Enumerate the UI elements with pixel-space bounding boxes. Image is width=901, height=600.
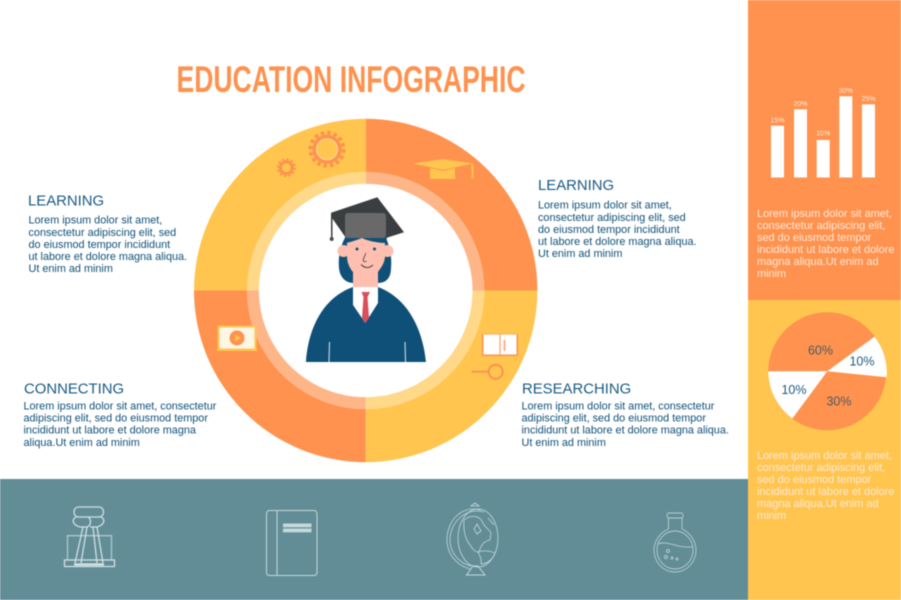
text block: orange panel: minim bbox=[757, 268, 786, 280]
text block: learning right bbox=[538, 178, 697, 260]
text block: connecting: aliqua.Ut enim ad minim bbox=[24, 437, 140, 449]
donut ring bbox=[194, 119, 537, 462]
title: EDUCATION INFOGRAPHIC bbox=[176, 59, 526, 100]
text block: yellow panel bbox=[757, 450, 894, 522]
text block: connecting: incididunt ut labore et dolore magna bbox=[24, 425, 197, 437]
panel: yellow pie chart side panel bbox=[748, 300, 901, 600]
bar chart bbox=[770, 88, 876, 178]
text block: learning left: do eiusmod tempor incididunt bbox=[28, 239, 170, 251]
text block: learning right: Ut enim ad minim bbox=[538, 248, 622, 260]
text block: researching bbox=[522, 382, 729, 449]
icon: graduation cap bbox=[413, 159, 473, 179]
text block: researching: incididunt ut labore et dolore magna aliqua. bbox=[522, 425, 729, 437]
text block: learning left: ut labore et dolore magna aliqua. bbox=[28, 251, 187, 263]
facial features bbox=[356, 248, 376, 268]
shirt and tie bbox=[353, 287, 378, 323]
icon: flask bbox=[654, 513, 696, 572]
bar chart: 10% bbox=[816, 130, 830, 138]
icon: magnifier bbox=[472, 365, 503, 379]
fringe bbox=[345, 237, 387, 243]
pie chart bbox=[768, 312, 887, 430]
panel: orange bar chart side panel bbox=[748, 0, 901, 300]
illustration: graduate bbox=[306, 197, 426, 362]
icon: globe bbox=[447, 503, 498, 575]
text block: learning left: Lorem ipsum dolor sit amet, bbox=[28, 215, 162, 227]
text block: learning right: LEARNING bbox=[538, 178, 614, 194]
text block: connecting: Lorem ipsum dolor sit amet, consectetur bbox=[24, 400, 217, 412]
text block: orange panel: incididunt ut labore et dolore bbox=[757, 244, 894, 256]
bar chart: 15% bbox=[770, 118, 785, 124]
text block: learning right: consectetur adipiscing elit, sed bbox=[538, 212, 686, 224]
text block: learning left: consectetur adipiscing elit, sed bbox=[28, 227, 176, 239]
text block: orange panel: consectetur adipiscing elit, bbox=[757, 220, 885, 232]
bar chart: 20% bbox=[793, 101, 808, 108]
text block: learning right: ut labore et dolore magna aliqua. bbox=[538, 236, 697, 248]
text block: learning left: LEARNING bbox=[28, 194, 104, 210]
text block: learning right: do eiusmod tempor incididunt bbox=[538, 224, 680, 236]
text block: researching: RESEARCHING bbox=[522, 382, 631, 398]
icon: video screen bbox=[217, 326, 257, 351]
text block: yellow panel: incididunt ut labore et dolore bbox=[757, 486, 894, 498]
text block: learning right: Lorem ipsum dolor sit amet, bbox=[538, 200, 672, 212]
text block: orange panel bbox=[757, 208, 894, 280]
pie chart: 10% bbox=[849, 354, 875, 368]
pie chart: 60% bbox=[808, 344, 833, 358]
text block: orange panel: sed do eiusmod tempor bbox=[757, 232, 872, 244]
text block: yellow panel: magna aliqua.Ut enim ad bbox=[757, 498, 879, 510]
mortarboard bbox=[330, 197, 404, 241]
neck and face bbox=[338, 236, 394, 292]
icon: notebook bbox=[266, 510, 317, 576]
pie chart: 30% bbox=[826, 394, 852, 408]
bar chart: 30% bbox=[839, 88, 853, 95]
text block: researching: Lorem ipsum dolor sit amet, consectetur bbox=[522, 400, 715, 412]
text block: yellow panel: sed do eiusmod tempor bbox=[757, 474, 872, 486]
text block: connecting: CONNECTING bbox=[24, 382, 124, 398]
pie chart: 10% bbox=[781, 383, 807, 397]
gown bbox=[306, 287, 426, 362]
text block: yellow panel: Lorem ipsum dolor sit amet, bbox=[757, 450, 892, 462]
hair back bbox=[339, 236, 391, 283]
text block: learning left: Ut enim ad minim bbox=[28, 263, 113, 275]
text block: orange panel: magna aliqua.Ut enim ad bbox=[757, 256, 879, 268]
text block: yellow panel: minim bbox=[757, 510, 786, 522]
icon: open book bbox=[482, 334, 518, 356]
text block: yellow panel: consectetur adipiscing elit, bbox=[757, 462, 885, 474]
text block: orange panel: Lorem ipsum dolor sit amet, bbox=[757, 208, 892, 220]
text block: connecting: adipiscing elit, sed do eiusmod tempor bbox=[24, 412, 208, 424]
bottom band bbox=[0, 479, 748, 600]
text block: learning left bbox=[28, 194, 187, 275]
bar chart: 25% bbox=[861, 96, 876, 103]
icon: gears bbox=[278, 133, 344, 176]
text block: connecting bbox=[24, 382, 217, 449]
text block: researching: Ut enim ad minim bbox=[522, 437, 606, 449]
icon: binder clip bbox=[64, 507, 114, 566]
text block: researching: adipiscing elit, sed do eiusmod tempor bbox=[522, 412, 706, 424]
